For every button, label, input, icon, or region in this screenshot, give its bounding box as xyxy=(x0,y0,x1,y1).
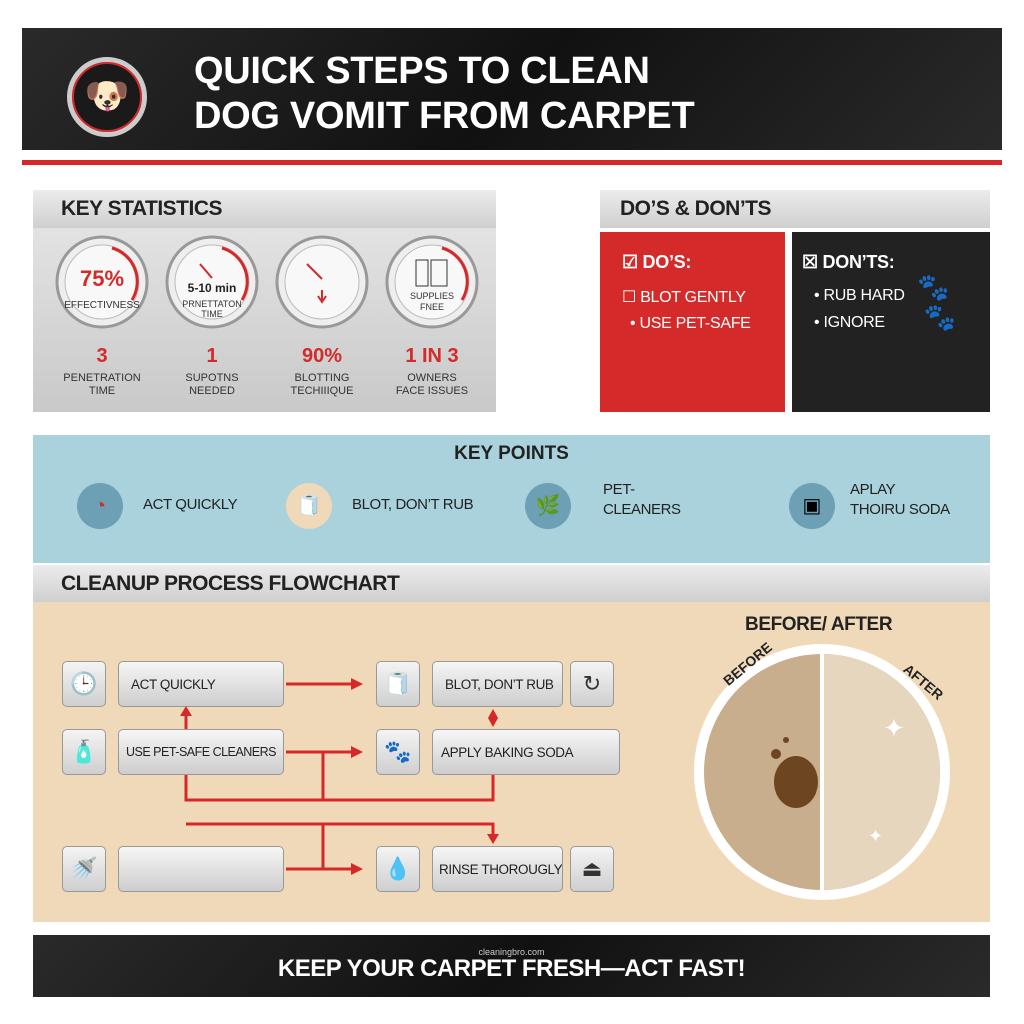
panel: dos and donts xyxy=(600,190,990,412)
heading: before/after: BEFORE/ AFTER xyxy=(745,614,892,635)
before/after circle: ✦ xyxy=(868,826,883,846)
heading: key statistics xyxy=(33,190,496,228)
header banner xyxy=(22,28,1002,150)
panel: flowchart: ⏏ xyxy=(582,856,602,881)
panel: flowchart: USE PET-SAFE CLEANERS xyxy=(126,745,276,759)
icon: paw prints: 🐾 xyxy=(924,302,956,332)
panel: key statistics: NEEDED xyxy=(189,385,235,397)
donts box: • IGNORE xyxy=(814,314,885,331)
panel: key statistics: 90% xyxy=(302,345,342,367)
panel: flowchart: ACT QUICKLY xyxy=(131,676,215,692)
panel: key points: ACT QUICKLY xyxy=(143,496,237,513)
dos box: • USE PET-SAFE xyxy=(630,315,751,332)
panel: flowchart: 🐾 xyxy=(384,739,412,764)
donts box: ☒ DON’TS: xyxy=(802,252,894,272)
gauges: FNEE xyxy=(420,302,444,312)
panel: key statistics: PENETRATION xyxy=(63,372,141,384)
heading: key points: KEY POINTS xyxy=(454,443,569,464)
logo icon: 🐶 xyxy=(85,75,129,116)
panel: key points: ▣ xyxy=(803,495,821,517)
panel: flowchart: 💧 xyxy=(384,856,412,881)
dos box xyxy=(600,232,785,412)
dos box: ☑ DO’S: xyxy=(622,252,691,272)
title: QUICK STEPS TO CLEAN xyxy=(194,50,650,92)
gauges: EFFECTIVNESS xyxy=(64,300,140,311)
panel: key statistics: 3 xyxy=(96,345,108,367)
title: DOG VOMIT FROM CARPET xyxy=(194,95,694,137)
panel: key statistics: 1 IN 3 xyxy=(405,345,459,367)
panel: key points: 🧻 xyxy=(297,495,321,517)
panel: flowchart xyxy=(33,602,990,922)
panel: key points: ◔ xyxy=(94,495,106,517)
donts box xyxy=(792,232,990,412)
panel: flowchart: ↻ xyxy=(583,671,601,696)
panel: key points: PET- xyxy=(603,481,635,498)
icon: paw prints: 🐾 xyxy=(917,272,949,302)
panel: flowchart: 🚿 xyxy=(70,856,98,881)
logo icon xyxy=(67,57,147,137)
title xyxy=(194,50,694,137)
donts box: • RUB HARD xyxy=(814,287,905,304)
before/after circle: AFTER xyxy=(900,661,946,703)
panel: flowchart: 🕒 xyxy=(70,671,98,696)
panel: key points: THOIRU SODA xyxy=(850,501,950,518)
gauges: 5-10 min xyxy=(188,281,236,295)
panel: key points xyxy=(33,435,990,563)
footer text: KEEP YOUR CARPET FRESH—ACT FAST! xyxy=(278,955,745,982)
panel: key points: APLAY xyxy=(850,481,895,498)
gauges: SUPPLIES xyxy=(410,291,454,301)
dos box: ☐ BLOT GENTLY xyxy=(622,289,746,306)
footer banner xyxy=(33,935,990,997)
panel: key points: CLEANERS xyxy=(603,501,681,518)
panel: key statistics: TECHIIIQUE xyxy=(291,385,353,397)
panel: key statistics xyxy=(33,190,496,412)
panel: flowchart: 🧻 xyxy=(384,671,412,696)
panel: key points: BLOT, DON’T RUB xyxy=(352,496,473,513)
panel: key statistics: TIME xyxy=(89,385,115,397)
panel: key statistics: SUPOTNS xyxy=(185,372,239,384)
panel: key statistics: 1 xyxy=(206,345,218,367)
panel: key statistics: BLOTTING xyxy=(294,372,350,384)
footer banner: cleaningbro.com xyxy=(478,947,545,957)
panel: flowchart: RINSE THOROUGLY xyxy=(439,862,562,876)
icon: paw prints xyxy=(917,272,956,332)
heading: cleanup process flowchart xyxy=(33,565,990,602)
before/after circle: ✦ xyxy=(883,713,905,743)
arrows xyxy=(180,678,499,875)
gauges xyxy=(56,236,478,328)
heading: cleanup process flowchart: CLEANUP PROCESS FLOWCHART xyxy=(61,572,399,595)
panel: flowchart: BLOT, DON’T RUB xyxy=(445,676,554,692)
panel: key statistics: OWNERS xyxy=(407,372,457,384)
heading: dos and donts xyxy=(600,190,990,228)
heading: dos and donts: DO’S & DON’TS xyxy=(620,197,771,220)
gauges: TIME xyxy=(201,309,223,319)
gauges: 75% xyxy=(80,266,124,291)
heading: key statistics: KEY STATISTICS xyxy=(61,197,222,220)
panel: key statistics: FACE ISSUES xyxy=(396,385,468,397)
panel: key points: 🌿 xyxy=(536,495,560,517)
gauges: PRNETTATON xyxy=(182,299,242,309)
before/after circle xyxy=(694,642,950,900)
panel: flowchart: 🧴 xyxy=(70,739,98,764)
panel: flowchart: APPLY BAKING SODA xyxy=(441,744,573,760)
